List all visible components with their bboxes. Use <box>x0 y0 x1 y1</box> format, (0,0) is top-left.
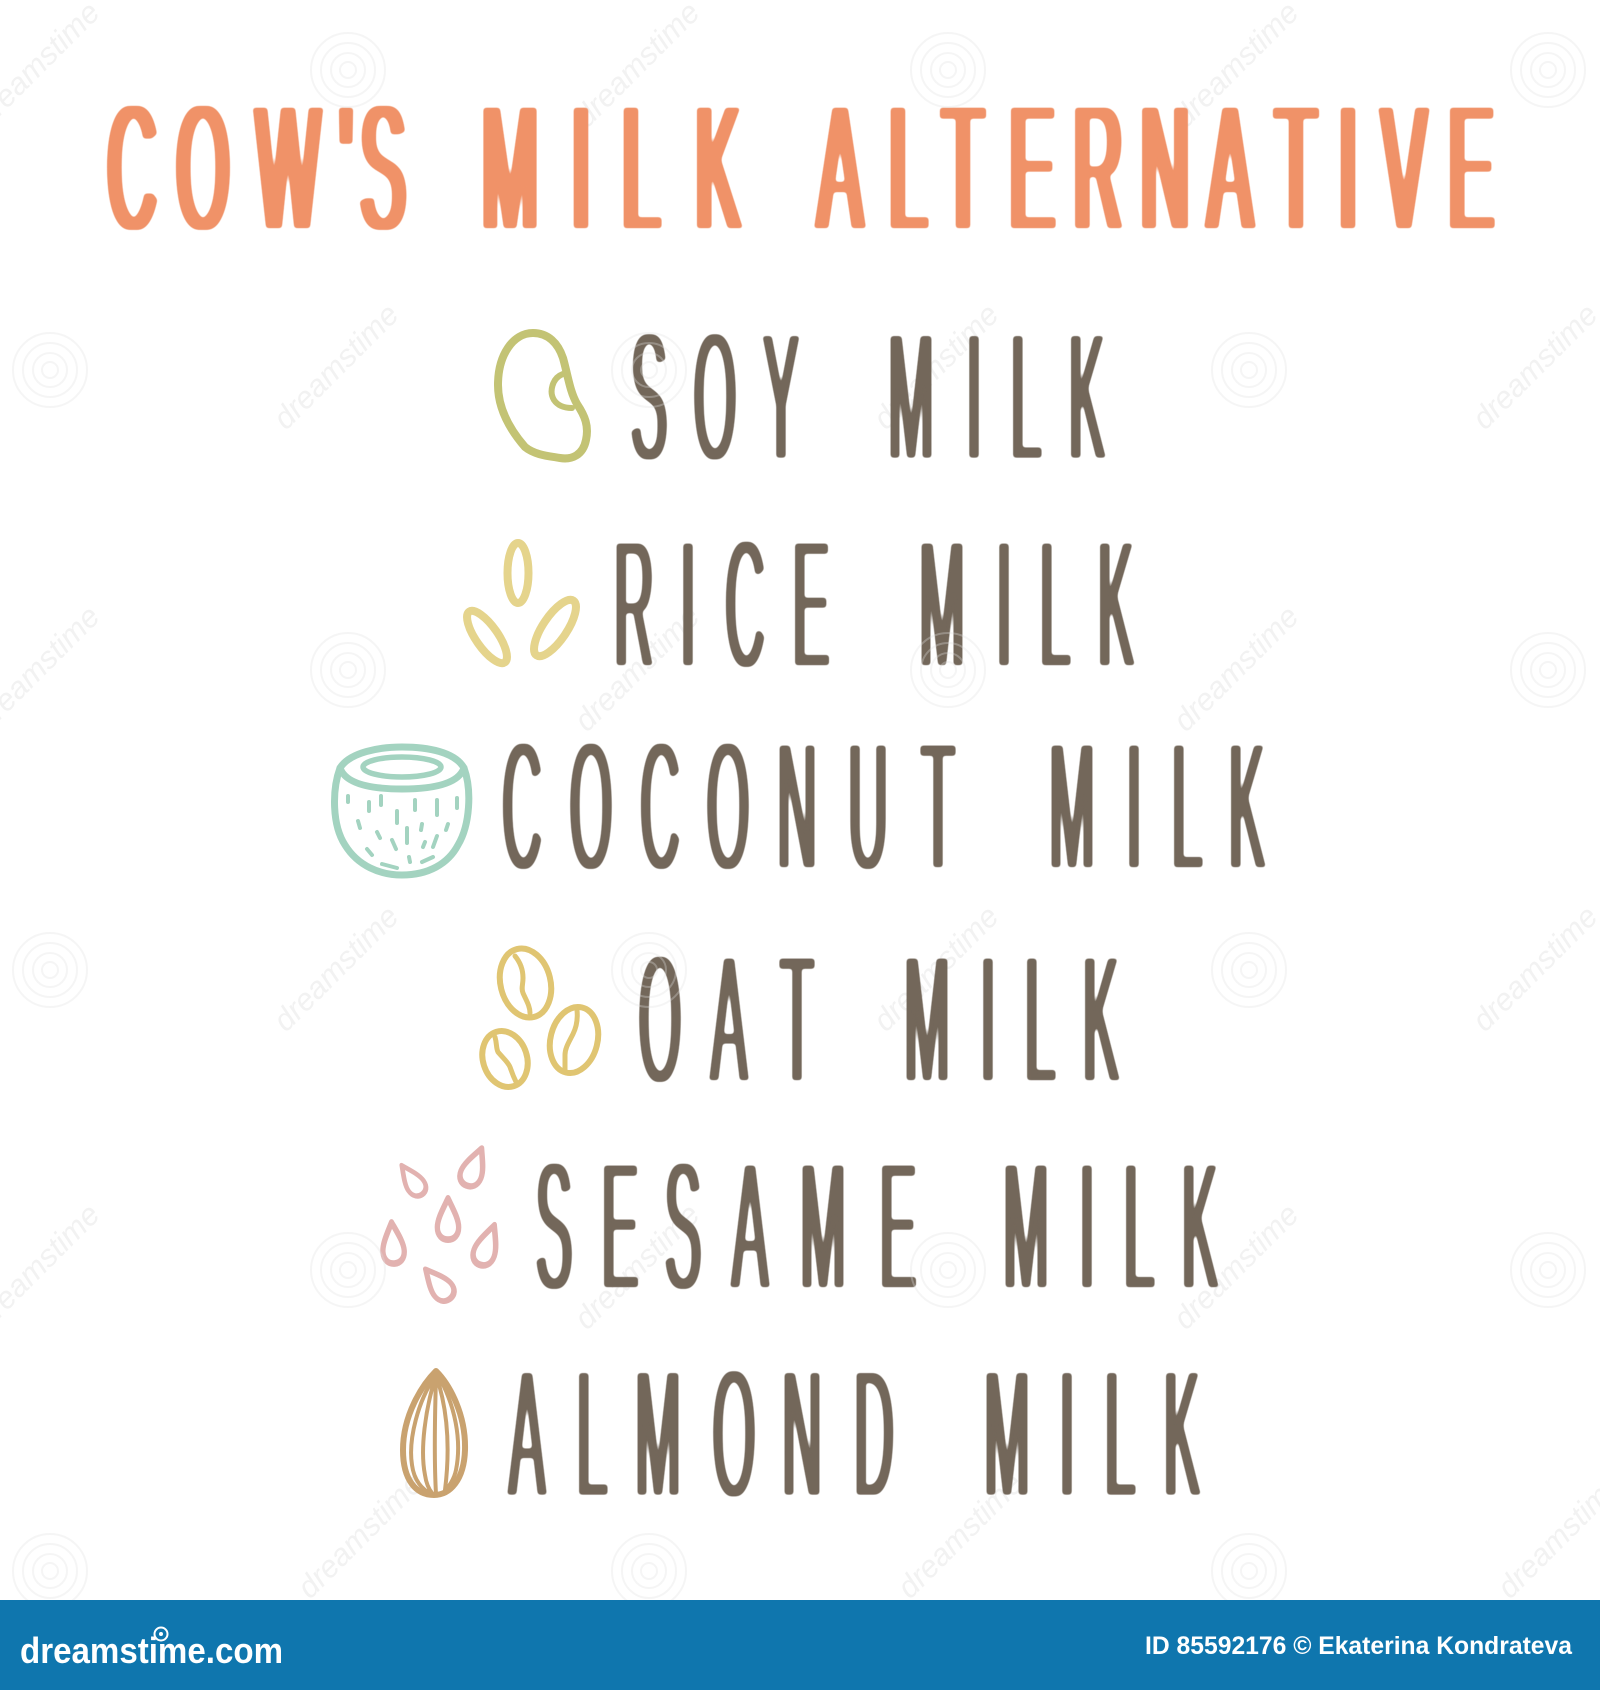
watermark text: dreamstime <box>290 1466 429 1605</box>
icon: oat flakes <box>475 943 605 1093</box>
label: rice milk: RICE MILK <box>614 503 1134 706</box>
icon: rice grains <box>460 543 583 669</box>
watermark text: dreamstime <box>1166 599 1305 738</box>
watermark text: dreamstime <box>567 599 706 738</box>
title: COW'S MILK ALTERNATIVE <box>108 68 1493 268</box>
watermark text: dreamstime <box>1166 1197 1305 1336</box>
label: coconut milk: COCONUT MILK <box>502 705 1265 908</box>
watermark text: dreamstime <box>866 899 1005 1038</box>
watermark text: dreamstime <box>567 1197 706 1336</box>
icon: sesame seeds <box>381 1144 504 1305</box>
icon: soy bean <box>498 333 587 458</box>
icon: coconut <box>335 747 469 875</box>
label: sesame milk: SESAME MILK <box>536 1125 1218 1328</box>
watermark text: dreamstime <box>266 899 405 1038</box>
watermark text: dreamstime <box>266 297 405 436</box>
label: soy milk: SOY MILK <box>631 296 1105 499</box>
label: almond milk: ALMOND MILK <box>509 1333 1200 1536</box>
footer credit: ID 85592176 © Ekaterina Kondrateva <box>1145 1632 1573 1660</box>
watermark text: dreamstime <box>866 297 1005 436</box>
watermark text: dreamstime <box>890 1466 1029 1605</box>
label: oat milk: OAT MILK <box>639 918 1119 1121</box>
footer logo: dreamstime.com: dreamstime.com <box>20 1630 283 1671</box>
footer band <box>0 1600 1600 1690</box>
icon: almond <box>403 1371 465 1495</box>
